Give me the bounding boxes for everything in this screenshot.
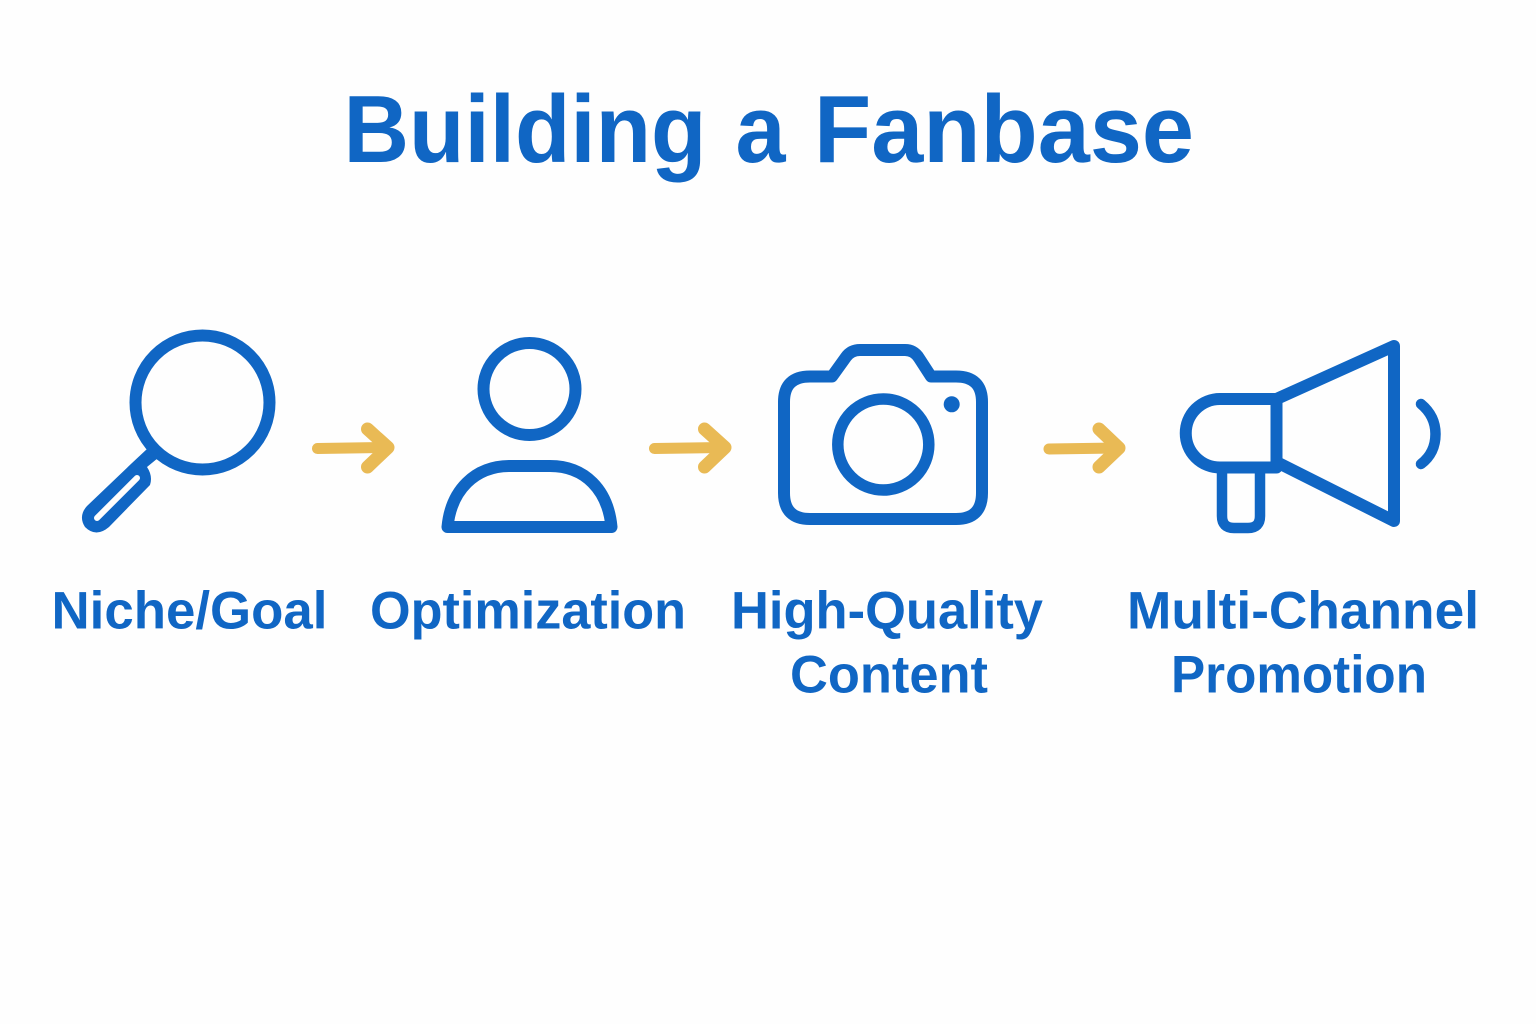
label: Multi-Channel Promotion: Promotion bbox=[1171, 646, 1427, 704]
label: Optimization: Optimization bbox=[370, 582, 686, 640]
label: Multi-Channel Promotion: Multi-Channel bbox=[1127, 582, 1479, 640]
arrow 2 bbox=[654, 429, 725, 467]
icon: megaphone bbox=[1186, 346, 1436, 528]
title: a bbox=[736, 76, 786, 183]
label: Multi-Channel Promotion bbox=[1127, 582, 1479, 704]
title: Fanbase bbox=[814, 76, 1194, 183]
label: High-Quality Content bbox=[731, 582, 1043, 704]
icon: camera bbox=[784, 350, 982, 519]
arrow 1 bbox=[318, 429, 388, 467]
icon: magnifying glass bbox=[82, 336, 270, 532]
title: Building bbox=[344, 76, 706, 183]
label: Niche/Goal: Niche/Goal bbox=[52, 582, 328, 640]
icon: person bbox=[448, 343, 612, 527]
label: High-Quality Content: High-Quality bbox=[731, 582, 1043, 640]
arrow 3 bbox=[1049, 429, 1119, 467]
title bbox=[344, 76, 1194, 183]
label: High-Quality Content: Content bbox=[790, 646, 988, 704]
